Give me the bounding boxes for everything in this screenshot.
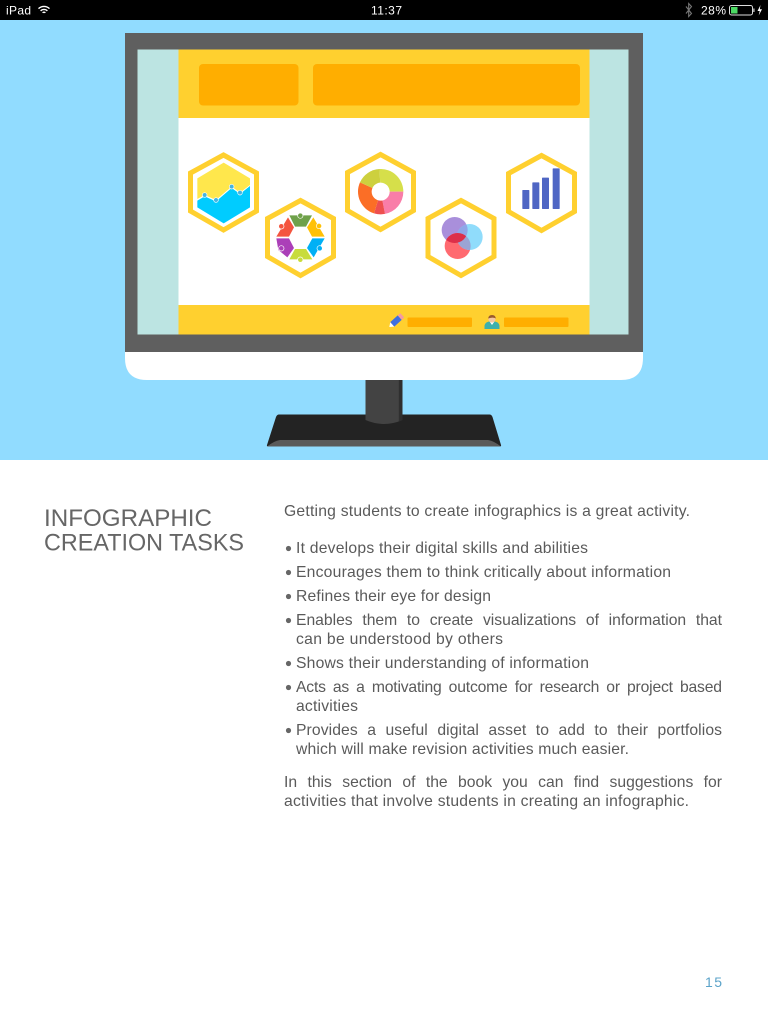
heading <box>44 505 244 556</box>
page number: 15 <box>705 974 722 990</box>
bullet: digital skills: It develops their digital skills and abilities <box>296 540 588 557</box>
icon: bluetooth <box>686 4 692 16</box>
bullet: motivating outcome: activities <box>296 698 358 715</box>
heading: INFOGRAPHIC <box>44 505 212 532</box>
status bar <box>0 0 768 20</box>
status: device name: iPad <box>6 4 31 18</box>
hexagon: area chart <box>190 155 256 230</box>
closing paragraph: activities that involve students in creating an infographic. <box>284 793 689 810</box>
monitor chin <box>125 352 643 380</box>
bullet: digital asset: Provides a useful digital asset to add to their portfolios <box>296 722 722 739</box>
icon: person <box>484 315 500 329</box>
screen content area <box>178 118 590 305</box>
hero illustration panel <box>0 20 768 460</box>
bullet list <box>286 540 723 758</box>
bullet: critical thinking: Encourages them to think critically about information <box>296 564 671 581</box>
bullet: visualizations: Enables them to create visualizations of information that <box>296 612 723 629</box>
monitor stand <box>267 379 501 446</box>
bullet: design eye: Refines their eye for design <box>296 588 491 605</box>
bullet: motivating outcome: Acts as a motivating outcome for research or project based <box>296 679 722 696</box>
stand base <box>267 414 501 446</box>
closing paragraph: In this section of the book you can find suggestions for <box>284 774 722 791</box>
bullet: visualizations: can be understood by others <box>296 631 503 648</box>
intro sentence: Getting students to create infographics is a great activity. <box>284 503 690 520</box>
hexagon: ring diagram <box>268 200 334 276</box>
monitor bezel <box>125 33 643 352</box>
bullet: digital asset: which will make revision activities much easier. <box>295 741 629 758</box>
icon: wifi <box>38 6 50 13</box>
icon: pencil <box>387 313 404 329</box>
bullet: visualizations <box>286 612 723 648</box>
hexagon: bar chart <box>508 156 574 230</box>
bullet: digital asset <box>286 722 722 758</box>
bullet: understanding: Shows their understanding of information <box>296 655 589 672</box>
hexagon: donut chart <box>348 154 414 230</box>
icon: charging bolt <box>758 5 762 16</box>
status: clock: 11:37 <box>371 4 402 18</box>
stand neck <box>366 379 402 424</box>
monitor screen <box>138 50 628 334</box>
screen footer <box>178 305 590 334</box>
icon: battery <box>730 6 754 15</box>
bullet: motivating outcome <box>286 679 722 715</box>
hexagon: venn diagram <box>428 200 494 276</box>
status: battery percent: 28% <box>701 4 726 18</box>
closing paragraph <box>284 774 722 810</box>
screen header <box>178 50 590 118</box>
heading: CREATION TASKS <box>44 529 244 556</box>
